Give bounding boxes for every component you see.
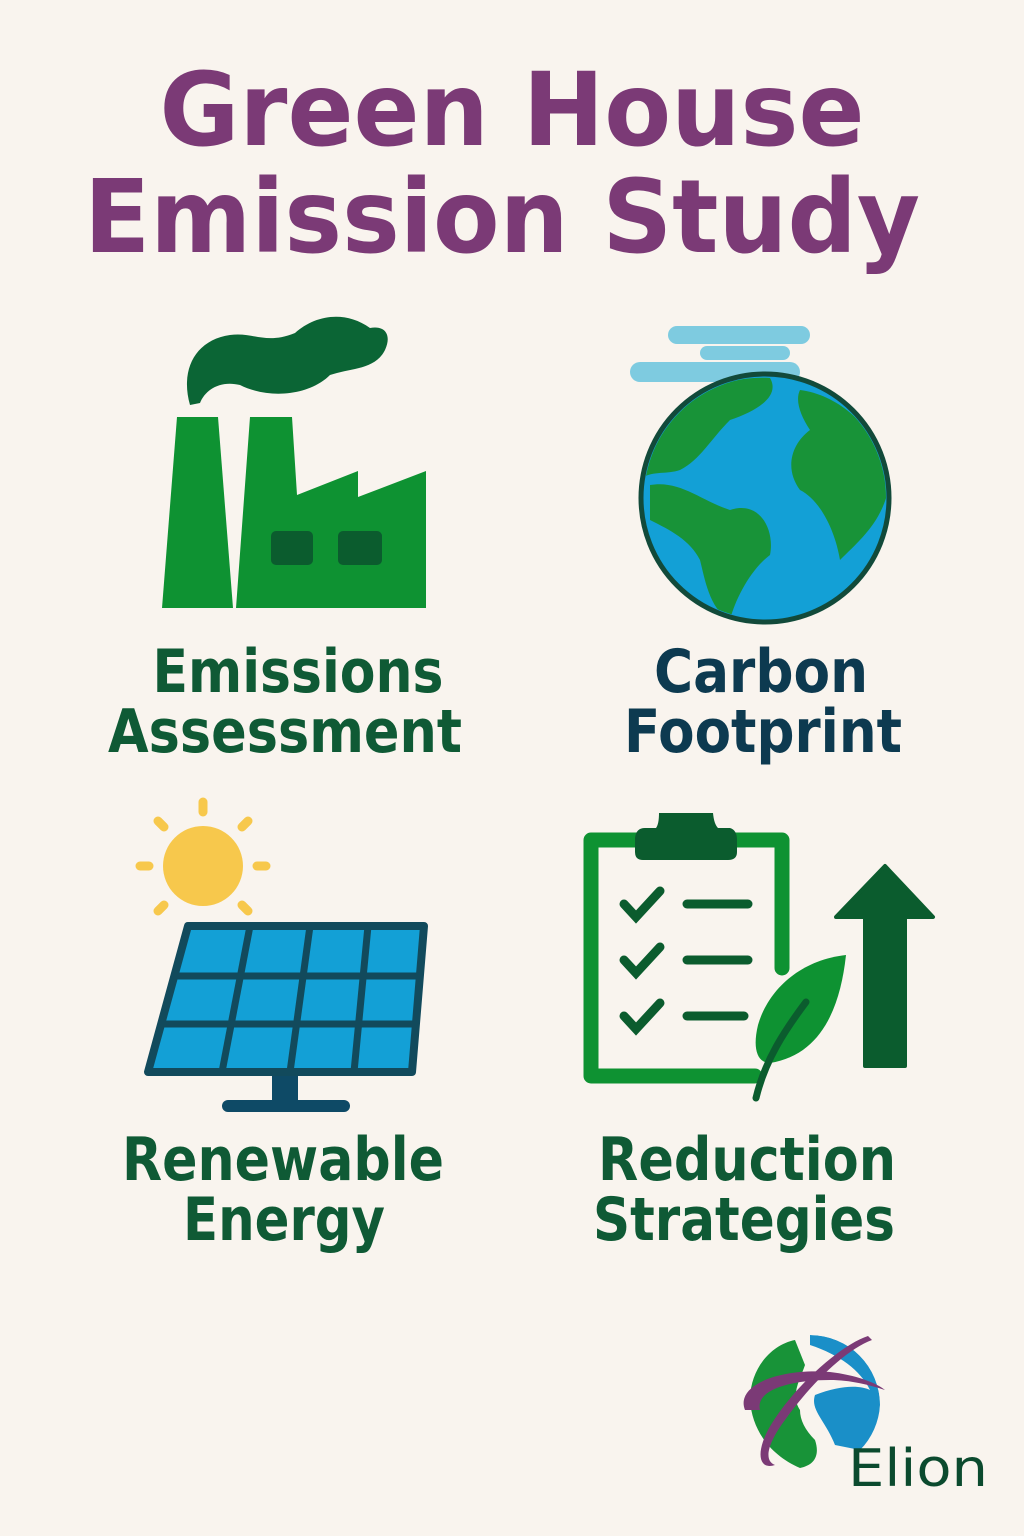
label: renewable energy: Energy: [183, 1185, 385, 1255]
logo: Elion: [744, 1335, 988, 1499]
label: emissions assessment: Emissions: [152, 637, 444, 707]
label: carbon footprint: [624, 637, 902, 767]
label: carbon footprint: Carbon: [654, 637, 868, 707]
icon: factory: [162, 317, 426, 608]
title: Green House: [160, 51, 864, 170]
title: [84, 51, 920, 277]
icon: sun: [140, 802, 266, 911]
label: emissions assessment: Assessment: [108, 697, 462, 767]
icon: solar panel: [148, 926, 424, 1112]
label: carbon footprint: Footprint: [624, 697, 902, 767]
label: renewable energy: Renewable: [122, 1125, 444, 1195]
icon: globe: [630, 326, 890, 622]
label: renewable energy: [122, 1125, 444, 1255]
label: emissions assessment: [108, 637, 462, 767]
label: reduction strategies: Strategies: [593, 1185, 895, 1255]
label: reduction strategies: Reduction: [598, 1125, 896, 1195]
icon: clipboard with leaf and arrow: [591, 813, 933, 1098]
logo text: Elion: [848, 1439, 988, 1499]
label: reduction strategies: [593, 1125, 896, 1255]
title: Emission Study: [84, 158, 920, 277]
